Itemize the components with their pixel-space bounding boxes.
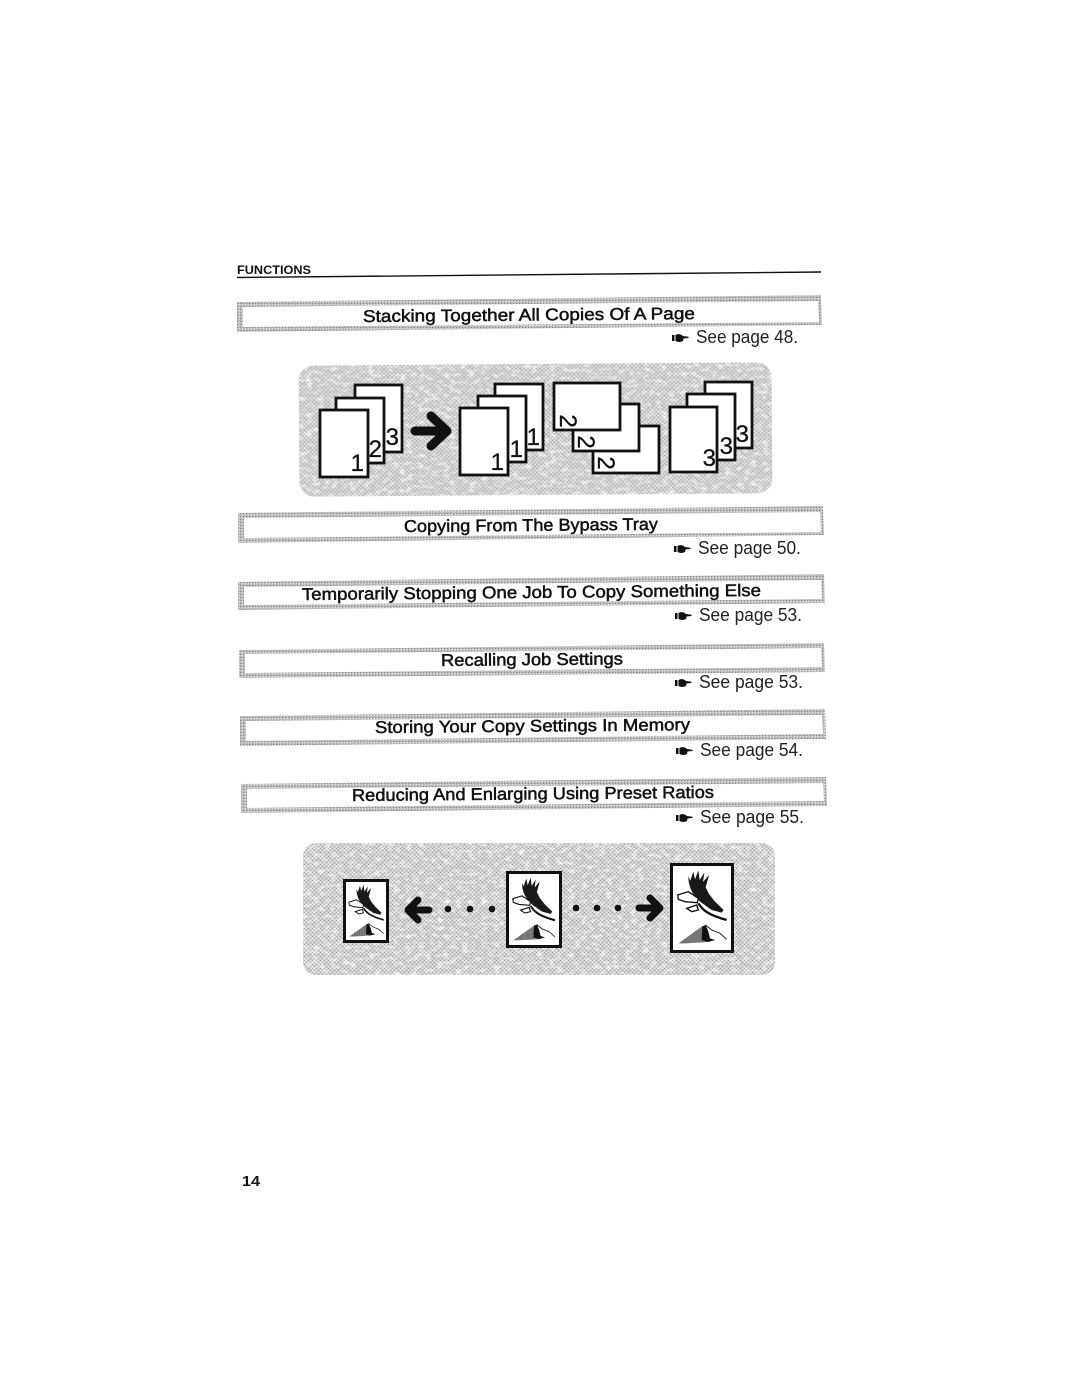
banner: reducing and enlarging bbox=[241, 777, 827, 813]
arrow: left bbox=[408, 900, 429, 920]
banner: reducing and enlarging: Reducing And Enlarging Using Preset Ratios bbox=[352, 783, 714, 805]
banner: recalling job settings bbox=[239, 643, 825, 678]
banner: bypass tray: Copying From The Bypass Tray bbox=[404, 515, 659, 536]
stack: copies of page 3: 3 bbox=[720, 433, 733, 460]
page number: 14 bbox=[242, 1173, 261, 1190]
reference: see page 50: See page 50. bbox=[698, 538, 801, 558]
stack: copies of page 3: 3 bbox=[736, 421, 749, 448]
panel: stacking illustration bbox=[299, 362, 772, 497]
banner: storing copy settings: Storing Your Copy Settings In Memory bbox=[375, 715, 691, 737]
stack: originals 1 2 3 bbox=[320, 385, 402, 477]
stack: copies of page 3: 3 bbox=[703, 445, 716, 472]
reference: see page 53: See page 53. bbox=[699, 605, 802, 625]
stack: rotated copies of page 2 bbox=[554, 383, 659, 473]
stack: originals 1 2 3: 3 bbox=[386, 424, 399, 451]
panel: reduce and enlarge illustration bbox=[303, 843, 775, 975]
dots: left bbox=[445, 906, 495, 912]
stack: copies of page 1: 1 bbox=[491, 449, 504, 476]
banner: temporarily stopping bbox=[238, 574, 825, 610]
section header: FUNCTIONS bbox=[237, 263, 821, 278]
banner: recalling job settings: Recalling Job Settings bbox=[441, 649, 623, 670]
stack: rotated copies of page 2: 2 bbox=[554, 414, 581, 428]
dots: right bbox=[573, 905, 621, 911]
reference: see page 53 second: See page 53. bbox=[699, 672, 803, 692]
stack: rotated copies of page 2: 2 bbox=[572, 435, 599, 449]
small copy with eagle bbox=[344, 880, 388, 942]
stack: originals 1 2 3: 1 bbox=[351, 450, 364, 477]
reference: see page 48: See page 48. bbox=[696, 327, 798, 347]
reference: see page 54: See page 54. bbox=[700, 740, 803, 760]
stack: rotated copies of page 2: 2 bbox=[592, 456, 619, 470]
arrow: right bbox=[639, 898, 660, 918]
banner: temporarily stopping: Temporarily Stopping One Job To Copy Something Else bbox=[302, 581, 761, 604]
banner: storing copy settings bbox=[240, 709, 826, 746]
banner: stacking together: Stacking Together All Copies Of A Page bbox=[363, 304, 695, 326]
banner: stacking together bbox=[237, 295, 822, 332]
large copy with eagle bbox=[672, 864, 732, 952]
stack: originals 1 2 3: 2 bbox=[369, 436, 382, 463]
medium copy with eagle bbox=[508, 872, 560, 946]
reference: see page 55: See page 55. bbox=[700, 807, 804, 827]
stack: copies of page 1: 1 bbox=[527, 424, 540, 451]
stack: copies of page 1 bbox=[460, 384, 543, 476]
banner: bypass tray bbox=[238, 506, 824, 543]
section header: FUNCTIONS: FUNCTIONS bbox=[237, 263, 311, 277]
arrow: right bbox=[415, 416, 447, 446]
stack: copies of page 3 bbox=[670, 382, 752, 472]
stack: copies of page 1: 1 bbox=[510, 436, 523, 463]
